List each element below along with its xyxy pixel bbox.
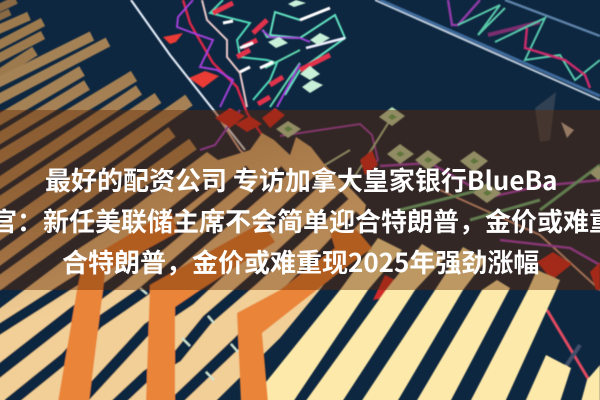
price lines upper centre [131,0,345,150]
title line 3: 合特朗普，金价或难重现2025年强劲涨幅 [62,243,539,280]
small tick marks [140,288,238,380]
upper fan of wooden bars [0,0,193,286]
lower left fan of bars [0,133,366,400]
diamond centres [284,114,492,196]
green diamonds upper [268,0,330,93]
orange arrows [58,210,372,400]
red markers upper [163,33,219,88]
green diamonds lower [276,107,600,203]
faded swoosh [535,92,556,142]
title line 1: 最好的配资公司 专访加拿大皇家银行BlueBa [45,161,558,198]
lower chart traces [200,110,600,380]
dark translucent band [0,110,600,290]
red markers lower [215,108,600,300]
cream bars [250,238,600,400]
arrow icon [561,122,574,138]
upper right trace band [375,0,600,100]
